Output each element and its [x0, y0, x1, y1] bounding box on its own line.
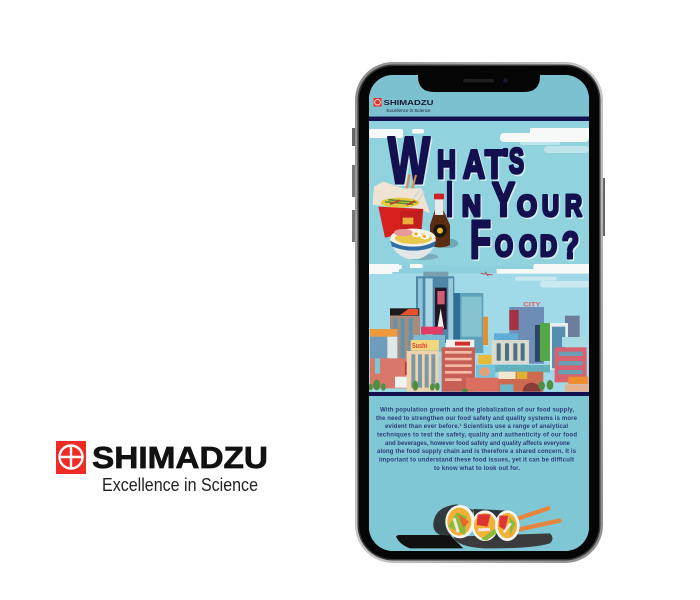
- city skyline illustration: [368, 265, 590, 397]
- chopsticks: [406, 174, 417, 188]
- title navy letters: O: [519, 230, 537, 263]
- intro paragraph: [376, 408, 578, 472]
- plane: [481, 272, 493, 276]
- title navy letters: S: [509, 142, 524, 181]
- right pink building: [555, 337, 588, 392]
- central glass tower: [416, 272, 454, 343]
- title shadow letters: R: [566, 189, 583, 224]
- sushi roll back: [433, 504, 473, 537]
- street trees: [369, 380, 553, 392]
- logo tagline: Excellence in Science: [102, 475, 258, 495]
- title shadow letters: F: [471, 211, 492, 271]
- green sign tower: [535, 323, 568, 370]
- title navy letters: Y: [492, 174, 515, 227]
- logo: Shimadzu Excellence in Science: [56, 440, 268, 495]
- sushi slice 2: [472, 510, 498, 541]
- title shadow letters: O: [520, 231, 538, 264]
- far-left buildings: [370, 329, 407, 388]
- plate: [396, 535, 463, 548]
- title navy letters: W: [388, 123, 430, 197]
- phone frame: [352, 62, 605, 563]
- header logo: Excellence in Science: [386, 108, 431, 113]
- title navy letters: O: [517, 190, 537, 223]
- ramen bowl: [390, 229, 438, 260]
- chopsticks: [517, 508, 559, 530]
- sushi slice 1: [445, 505, 475, 538]
- phone notch: [418, 75, 540, 92]
- soy sauce bottle: [430, 194, 458, 248]
- city sign tower: CITY: [523, 301, 542, 308]
- title shadow letters: ?: [563, 226, 580, 267]
- intro paragraph: to know what to look out for.: [434, 466, 520, 472]
- title shadow letters: A: [464, 144, 486, 188]
- logo wordmark: SHIMADZU: [92, 440, 268, 475]
- title navy letters: T: [485, 143, 504, 187]
- title navy letters: N: [462, 190, 481, 223]
- illustration: sushi rolls on plate with chopsticks: [396, 504, 559, 548]
- intro paragraph: important to understand these food issues, yet it can be difficult: [379, 458, 574, 464]
- grey-white building: [478, 333, 529, 364]
- intro text panel: [369, 396, 589, 551]
- title shadow letters: W: [389, 124, 432, 198]
- ground line: [369, 392, 589, 396]
- title: What's In Your Food?: [387, 136, 584, 261]
- title navy letters: R: [565, 188, 582, 223]
- title navy letters: ': [503, 145, 508, 172]
- sushi slice 3: [495, 510, 520, 541]
- icon: Shimadzu red emblem: [56, 441, 86, 474]
- intro paragraph: With population growth and the globalization of our food supply,: [380, 408, 574, 414]
- title navy letters: U: [542, 190, 559, 223]
- title navy letters: O: [495, 230, 513, 263]
- title shadow letters: O: [518, 191, 538, 224]
- central station: [466, 365, 550, 392]
- app header bar: [369, 75, 589, 121]
- title shadow letters: [396, 138, 584, 261]
- title navy letters: ?: [562, 225, 579, 266]
- teal tower: [454, 293, 488, 353]
- header logo: [374, 98, 434, 113]
- title navy letters: F: [470, 210, 491, 270]
- phone mockup: [352, 62, 605, 563]
- sky with clouds: [369, 121, 589, 272]
- title shadow letters: D: [541, 231, 558, 264]
- title shadow letters: I: [447, 174, 454, 228]
- title shadow letters: U: [543, 191, 560, 224]
- phone screen: [368, 75, 590, 551]
- illustration: noodle box, soy sauce and ramen bowl: [373, 174, 458, 260]
- title navy letters: H: [437, 143, 456, 187]
- intro paragraph: the need to strengthen our food safety and quality systems is more: [376, 416, 578, 422]
- title shadow letters: Y: [493, 175, 516, 228]
- title navy letters: [387, 136, 583, 260]
- title navy letters: D: [540, 230, 557, 263]
- intro paragraph: along the food supply chain and is therefore a shared concern. It is: [377, 449, 577, 455]
- brick building: [442, 340, 475, 392]
- intro paragraph: evident than ever before.¹ Scientists use a range of analytical: [385, 423, 568, 430]
- header logo: SHIMADZU: [384, 98, 434, 107]
- pink sign and cream building: Sushi: [412, 343, 427, 350]
- intro paragraph: and beverages, however food safety and quality affects everyone: [385, 441, 571, 447]
- title shadow letters: O: [496, 231, 514, 264]
- city sky: [368, 273, 590, 392]
- noodle box: [373, 182, 430, 238]
- title navy letters: A: [463, 143, 485, 187]
- city sign tower: [509, 301, 580, 364]
- title shadow letters: T: [486, 144, 505, 188]
- title navy letters: I: [446, 173, 453, 227]
- pink sign and cream building: [407, 327, 445, 392]
- title shadow letters: S: [510, 143, 525, 182]
- left orange tower: [390, 308, 420, 362]
- title shadow letters: N: [463, 191, 482, 224]
- intro paragraph: techniques to test the safety, quality and authenticity of our food: [377, 432, 577, 438]
- city clouds: [368, 265, 590, 274]
- title shadow letters: H: [438, 144, 457, 188]
